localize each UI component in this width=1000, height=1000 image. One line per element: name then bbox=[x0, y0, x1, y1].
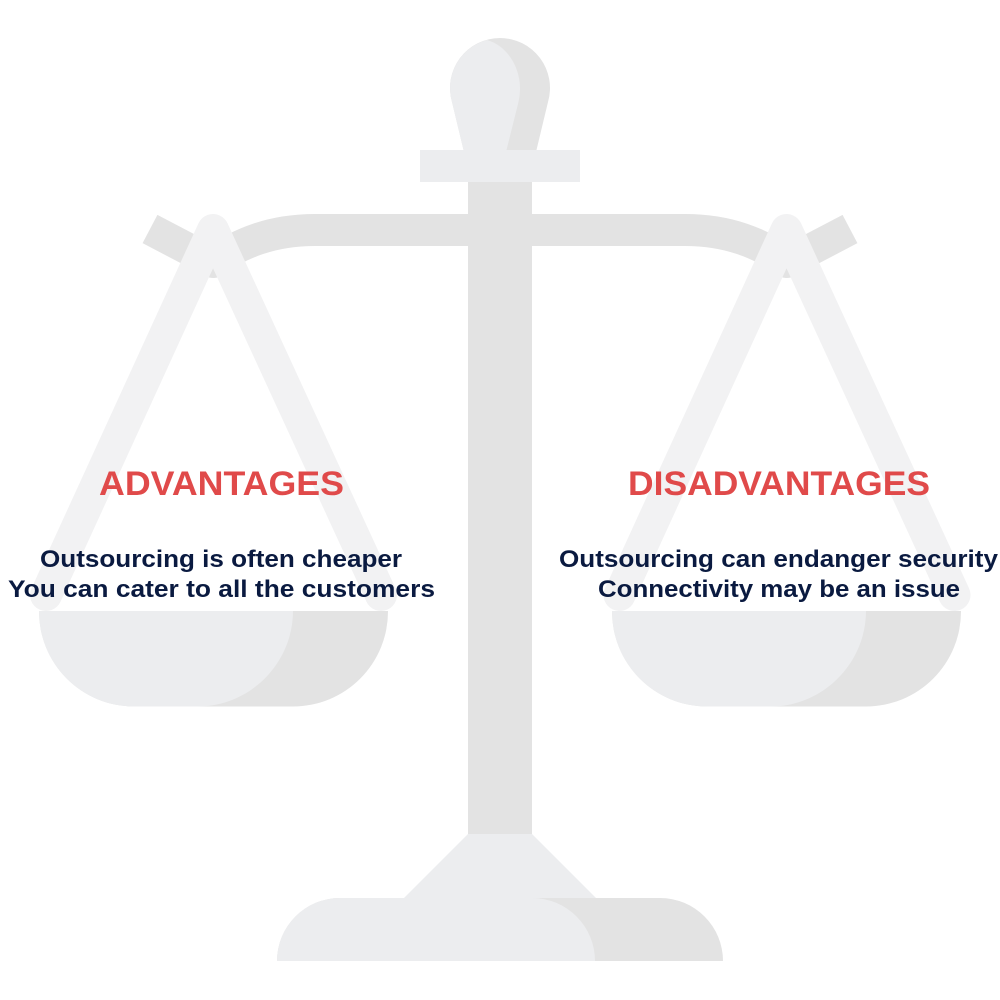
text block: advantages bbox=[8, 546, 435, 603]
right pan bbox=[612, 611, 961, 707]
beam arms bbox=[150, 229, 850, 262]
left pan straps bbox=[46, 230, 381, 595]
collar bbox=[420, 150, 580, 182]
text block: advantages: Outsourcing is often cheaper bbox=[40, 546, 402, 573]
left pan bbox=[39, 611, 388, 707]
text block: disadvantages: Connectivity may be an issue bbox=[598, 576, 960, 603]
text block: advantages: You can cater to all the customers bbox=[8, 576, 435, 603]
heading: disadvantages: DISADVANTAGES bbox=[628, 465, 930, 503]
pole bbox=[468, 180, 532, 836]
knob bbox=[450, 38, 550, 152]
heading: advantages: ADVANTAGES bbox=[99, 465, 344, 503]
base bbox=[277, 898, 723, 961]
base neck bbox=[404, 834, 596, 900]
right pan straps bbox=[620, 230, 954, 595]
text block: disadvantages: Outsourcing can endanger security bbox=[559, 546, 999, 573]
text block: disadvantages bbox=[559, 546, 999, 603]
